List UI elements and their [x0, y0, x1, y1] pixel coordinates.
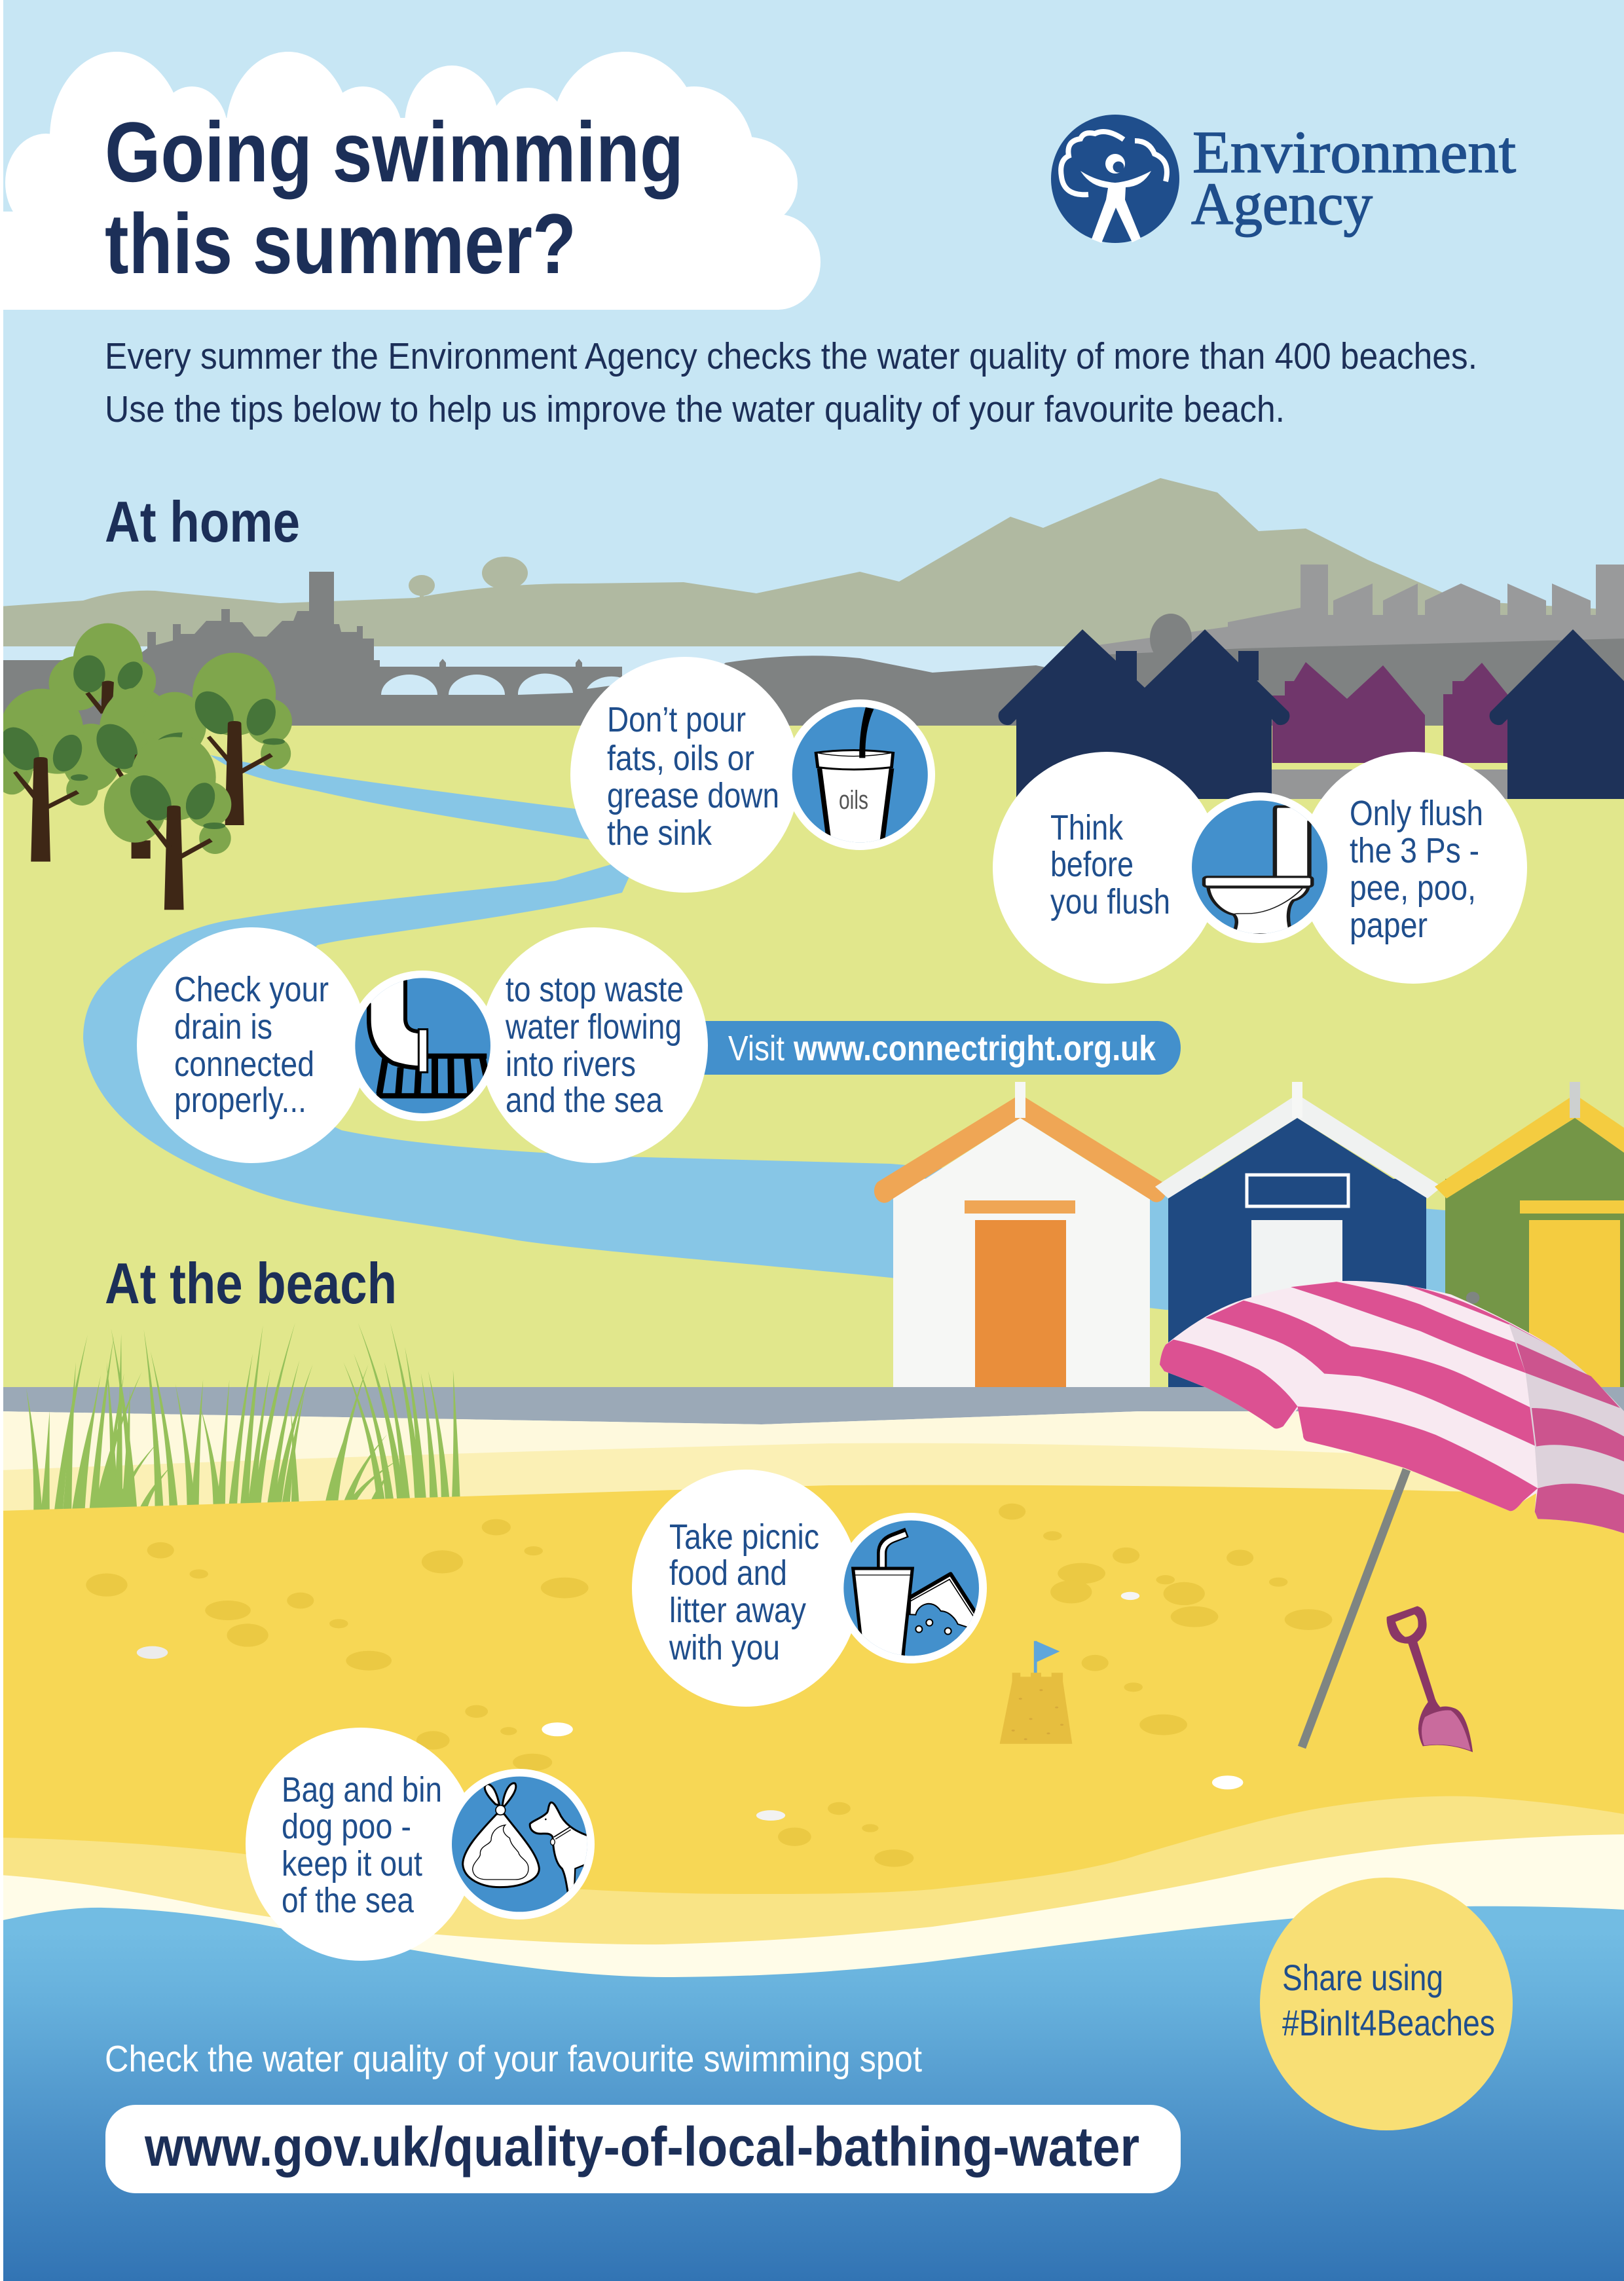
- sandcastle with flag: [1000, 1641, 1072, 1744]
- icon: drain pipe: [355, 971, 490, 1121]
- tip: bag and bin dog poo: [246, 1728, 476, 1961]
- beach hut: green: [1435, 1082, 1624, 1387]
- trees: [0, 623, 292, 910]
- Environment Agency logo: Agency: [1191, 171, 1373, 237]
- field: [0, 726, 1624, 1390]
- wet sand and foam bands: [0, 1796, 1624, 2030]
- tip: bag and bin dog poo: dog poo -: [282, 1807, 411, 1846]
- page edge strip: [0, 0, 3, 2281]
- tip: take picnic food: [632, 1470, 860, 1707]
- Environment Agency logo: [1051, 115, 1516, 243]
- tip: take picnic food: food and: [669, 1553, 787, 1593]
- link pill: connectright: [694, 1021, 1181, 1075]
- pale sand bands: [0, 1411, 1624, 1572]
- tip: take picnic food: litter away: [669, 1591, 806, 1630]
- call to action text: Check the water quality of your favourite swimming spot: [105, 2038, 922, 2080]
- grey strip behind houses: [1272, 770, 1534, 799]
- spade: [1387, 1606, 1473, 1752]
- tip: bag and bin dog poo: Bag and bin: [282, 1770, 442, 1809]
- beach hut: blue: [1155, 1082, 1442, 1387]
- tip: check your drain: properly...: [174, 1081, 306, 1120]
- icon: oil cup: [784, 699, 935, 856]
- link text: connectright: www.connectright.org.uk: [793, 1029, 1156, 1068]
- golden sand: [0, 1485, 1624, 1965]
- tip: check your drain: water flowing: [505, 1007, 682, 1047]
- tip: think before you flush: [993, 752, 1527, 984]
- intro text: [105, 335, 1477, 430]
- tip: check your drain: connected: [174, 1045, 314, 1084]
- sea: [0, 1906, 1624, 2281]
- bridge and grey ground: [0, 656, 1113, 726]
- web address pill: www.gov.uk/quality-of-local-bathing-water: [144, 2116, 1139, 2178]
- tip: don't pour fats: [570, 657, 800, 893]
- tip: take picnic food: Take picnic: [669, 1517, 819, 1557]
- tip: think before you flush: before: [1050, 845, 1134, 884]
- road: [0, 1387, 1624, 1424]
- intro text: Use the tips below to help us improve the water quality of your favourite beach.: [105, 388, 1285, 430]
- title: [105, 104, 684, 291]
- link text: connectright: Visit: [728, 1029, 784, 1068]
- left town silhouette: [131, 572, 374, 720]
- tip: check your drain: drain is: [174, 1007, 272, 1047]
- tip: don't pour fats: grease down: [607, 776, 779, 815]
- intro text: Every summer the Environment Agency checks the water quality of more than 400 beaches.: [105, 335, 1477, 377]
- beach umbrella: [1160, 1281, 1624, 1533]
- tip: think before you flush: pee, poo,: [1350, 868, 1476, 908]
- tip: take picnic food: with you: [669, 1628, 780, 1667]
- tip: don't pour fats: Don’t pour: [607, 700, 746, 739]
- water band behind bridge: [0, 646, 1113, 699]
- river: [83, 755, 1460, 1323]
- navy houses: [999, 629, 1624, 799]
- tip: bag and bin dog poo: keep it out: [282, 1844, 422, 1883]
- tip: check your drain: [137, 927, 708, 1163]
- hashtag bubble: Share using: [1282, 1957, 1443, 1998]
- title: this summer?: [105, 196, 576, 291]
- heading: at the beach: At the beach: [105, 1251, 397, 1316]
- tip: check your drain: to stop waste: [506, 970, 684, 1009]
- tip: bag and bin dog poo: of the sea: [282, 1881, 415, 1920]
- sand spots: [86, 1504, 1332, 1867]
- hashtag bubble: [1260, 1878, 1513, 2130]
- tip: check your drain: and the sea: [506, 1081, 663, 1120]
- tip: don't pour fats: fats, oils or: [607, 739, 754, 778]
- tip: think before you flush: Only flush: [1350, 794, 1483, 833]
- beach hut: orange: [874, 1082, 1166, 1387]
- heading: at home: At home: [105, 489, 300, 554]
- cloud behind title: [3, 52, 821, 310]
- hashtag bubble: #BinIt4Beaches: [1282, 2002, 1495, 2043]
- tip: think before you flush: paper: [1350, 906, 1428, 945]
- icon: oil cup: oils: [839, 786, 868, 815]
- tip: think before you flush: the 3 Ps -: [1350, 831, 1479, 870]
- icon: toilet: [1184, 792, 1335, 943]
- tip: think before you flush: Think: [1050, 808, 1124, 847]
- beach grass: [26, 1323, 460, 1513]
- tip: check your drain: Check your: [174, 970, 329, 1009]
- beach umbrella pole: [1302, 1470, 1407, 1747]
- distant hills and small trees: [0, 478, 1624, 655]
- tip: don't pour fats: the sink: [607, 813, 712, 853]
- tip: think before you flush: you flush: [1050, 882, 1170, 921]
- right town silhouette: [1098, 565, 1624, 726]
- title: Going swimming: [105, 104, 684, 200]
- Environment Agency logo: Environment: [1192, 119, 1516, 185]
- tip: check your drain: into rivers: [506, 1045, 636, 1084]
- sky background: [0, 0, 1624, 786]
- icon: cup and food: [836, 1513, 987, 1663]
- icon: dog and poo bag: [444, 1769, 596, 1919]
- purple houses: [1272, 662, 1513, 763]
- web address pill: [105, 2105, 1181, 2193]
